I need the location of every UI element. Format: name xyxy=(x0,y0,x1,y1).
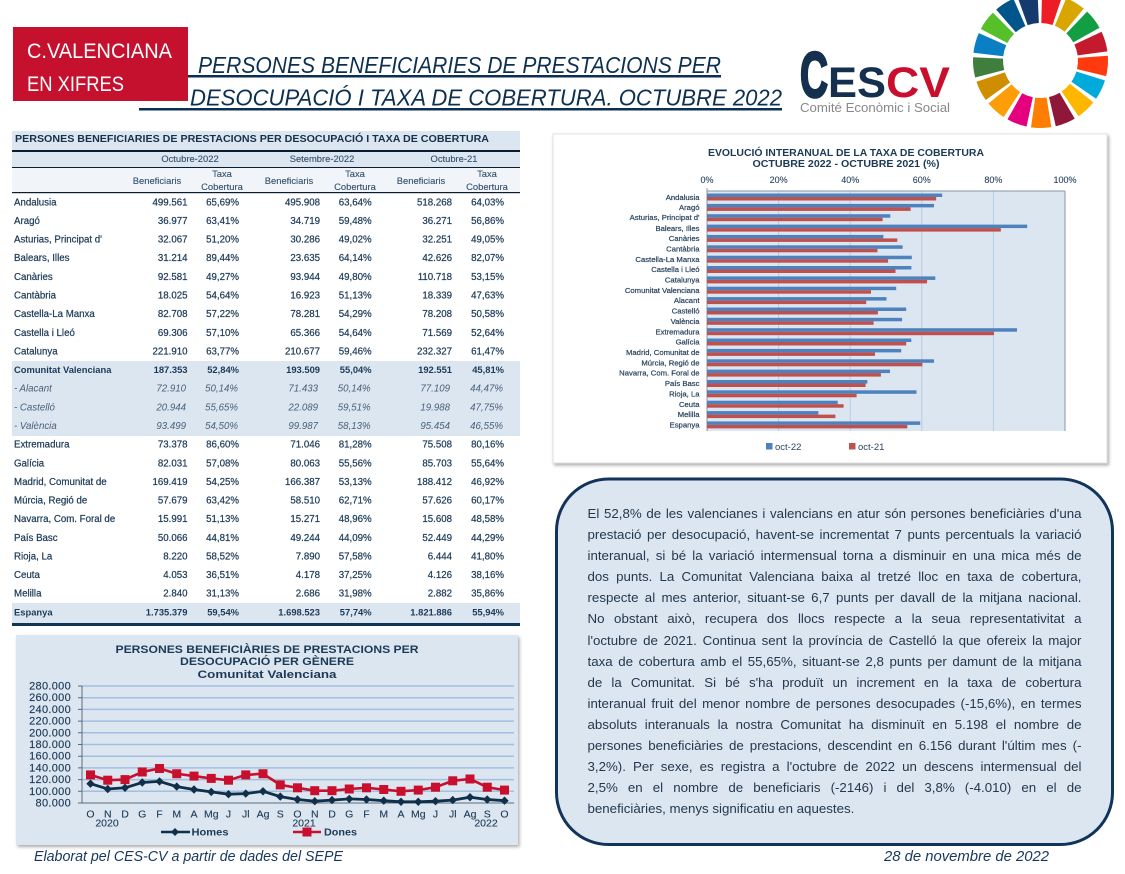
bar chart category labels: Castella-La Manxa xyxy=(635,255,700,264)
table rows: 82.031 xyxy=(158,458,188,469)
table column headers: Cobertura xyxy=(466,181,509,192)
commentary paragraph: beneficiàries, menys significatiu en aquestes. xyxy=(588,801,854,816)
line chart x axis: M xyxy=(379,809,388,821)
line chart x axis: Jl xyxy=(449,809,457,821)
table rows: 48,96% xyxy=(339,514,372,525)
table rows: Castella-La Manxa xyxy=(14,309,95,320)
table rows: 59,48% xyxy=(339,216,372,227)
table rows: 63,64% xyxy=(339,197,372,208)
table rows: Aragó xyxy=(14,216,40,227)
table rows: 49,27% xyxy=(206,272,239,283)
line chart y axis: 140.000 xyxy=(29,762,71,774)
table column headers: Cobertura xyxy=(334,181,377,192)
table rows: 44,81% xyxy=(206,533,239,544)
commentary paragraph: respecte al mes anterior, situant-se 6,7 punts per davall de la mitjana nacional. xyxy=(588,590,1082,605)
table rows: 41,80% xyxy=(471,552,504,562)
table rows: Canàries xyxy=(14,272,53,283)
table rows: 71.569 xyxy=(422,328,452,339)
table column headers: Octubre-21 xyxy=(431,153,477,164)
title xyxy=(139,52,782,110)
icon: SDG wheel xyxy=(966,0,1115,135)
line chart x axis: 2022 xyxy=(474,818,498,830)
table column headers: Taxa xyxy=(212,168,233,179)
table rows: 51,20% xyxy=(206,235,239,246)
line chart x axis xyxy=(86,809,509,830)
commentary paragraph: El 52,8% de les valencianes i valencians en atur són persones beneficiàries d'una xyxy=(588,506,1082,521)
line chart x axis: O xyxy=(86,809,95,821)
bar chart category labels xyxy=(619,193,700,430)
date: 28 de novembre de 2022 xyxy=(883,848,1050,865)
table rows: 31,13% xyxy=(206,589,239,600)
commentary paragraph: interanual fruit del menor nombre de persones desocupades (-15,6%), en termes xyxy=(588,696,1082,711)
table rows: 82.708 xyxy=(158,309,188,320)
line chart x axis: G xyxy=(345,809,353,821)
table column headers: Beneficiaris xyxy=(133,175,182,186)
table rows: 499.561 xyxy=(152,197,188,208)
bar chart axis xyxy=(700,175,1077,185)
table rows: 57,10% xyxy=(206,328,239,339)
table rows: 50,14% xyxy=(205,384,238,395)
table rows: 64,14% xyxy=(339,253,372,264)
line chart legend xyxy=(161,828,357,838)
bar chart category labels: Espanya xyxy=(670,420,700,430)
table rows: 80,16% xyxy=(471,440,504,451)
table rows: 99.987 xyxy=(288,421,319,432)
table rows: 188.412 xyxy=(417,477,452,488)
table rows: 59,46% xyxy=(339,346,372,357)
bar chart category labels: Navarra, Com. Foral de xyxy=(619,369,700,378)
table rows: 46,55% xyxy=(470,421,503,432)
panel: data table xyxy=(12,131,520,626)
line chart x axis: N xyxy=(104,809,112,821)
bar chart category labels: Balears, Illes xyxy=(655,224,700,233)
line chart title: DESOCUPACIÓ PER GÈNERE xyxy=(180,655,354,668)
table rows: 50,14% xyxy=(338,384,371,395)
table rows: 46,92% xyxy=(471,477,504,488)
bar chart category labels: Comunitat Valenciana xyxy=(625,286,700,295)
table rows: 47,63% xyxy=(471,290,504,302)
bar chart category labels: Castelló xyxy=(672,307,700,316)
line chart y axis: 200.000 xyxy=(29,727,71,739)
bar chart axis: 0% xyxy=(700,175,714,185)
table rows: 93.944 xyxy=(290,272,321,283)
commentary paragraph: de la Comunitat. Si bé s'ha produït un increment en la taxa de cobertura xyxy=(588,675,1082,690)
line chart y axis: 80.000 xyxy=(36,798,71,810)
table rows: 53,13% xyxy=(339,477,372,488)
table rows: 47,75% xyxy=(470,402,503,413)
table rows: Catalunya xyxy=(14,346,58,357)
table rows: 62,71% xyxy=(339,496,372,506)
table rows: 4.178 xyxy=(296,570,320,581)
table rows: 57,08% xyxy=(206,458,239,469)
line chart x axis: O xyxy=(293,809,302,821)
bar chart category labels: Catalunya xyxy=(665,276,700,284)
table rows: Ceuta xyxy=(14,570,40,581)
table rows: 61,47% xyxy=(471,346,504,357)
badge: C.Valenciana en xifres: EN XIFRES xyxy=(27,73,124,96)
table rows: 55,64% xyxy=(471,458,504,469)
bar chart category labels: Madrid, Comunitat de xyxy=(626,348,700,357)
table rows: 49,80% xyxy=(339,272,372,283)
logo: CES-CV: Comité Econòmic i Social xyxy=(800,100,950,115)
line chart legend: Dones xyxy=(324,828,357,838)
line chart y axis: 260.000 xyxy=(29,692,71,704)
table rows: 169.419 xyxy=(152,477,188,488)
table rows: 55,65% xyxy=(205,402,238,413)
line chart y axis: 180.000 xyxy=(29,739,71,751)
table rows: 23.635 xyxy=(290,253,320,264)
table rows: 58,52% xyxy=(206,552,239,562)
table rows: 52,84% xyxy=(207,364,240,375)
table rows: 51,13% xyxy=(206,514,239,525)
table rows: 59,54% xyxy=(207,606,240,617)
line chart x axis: O xyxy=(500,809,509,821)
table rows: - Castelló xyxy=(14,402,56,413)
table rows: 60,17% xyxy=(471,496,504,506)
table rows: 30.286 xyxy=(290,235,320,246)
line chart x axis: 2020 xyxy=(95,818,119,830)
table rows: 32.067 xyxy=(158,235,188,246)
commentary paragraph xyxy=(588,503,1088,828)
bar chart category labels: Asturias, Principat d' xyxy=(630,213,700,222)
badge: C.Valenciana en xifres: C.VALENCIANA xyxy=(27,40,172,63)
table rows: 44,09% xyxy=(339,533,372,544)
commentary paragraph: l'octubre de 2021. Continua sent la província de Castelló la que ofereix la major xyxy=(588,633,1082,648)
table column headers: Taxa xyxy=(477,168,498,179)
table rows: 22.089 xyxy=(287,402,319,413)
panel: line chart, gènere xyxy=(16,635,518,845)
bar chart category labels: Rioja, La xyxy=(669,389,700,398)
table rows: 86,60% xyxy=(206,440,239,451)
table rows xyxy=(14,197,505,617)
table rows: 36,51% xyxy=(206,570,239,581)
bar chart title: EVOLUCIÓ INTERANUAL DE LA TAXA DE COBERTURA xyxy=(708,146,984,159)
table rows: 54,25% xyxy=(206,477,239,488)
table rows: 166.387 xyxy=(285,477,320,488)
line chart x axis: F xyxy=(363,809,370,821)
bar chart category labels: Melilla xyxy=(678,410,700,419)
line chart y axis xyxy=(29,680,71,810)
table rows: Cantàbria xyxy=(14,290,57,302)
bar chart axis: 20% xyxy=(770,175,788,185)
table rows: 2.686 xyxy=(296,589,320,600)
table rows: 58.510 xyxy=(290,496,321,506)
table rows: Galícia xyxy=(14,458,45,469)
table rows: Extremadura xyxy=(14,440,70,451)
table rows: 56,86% xyxy=(471,216,504,227)
bar chart category labels: Galícia xyxy=(676,338,700,347)
table rows: 2.882 xyxy=(428,589,452,600)
table rows: 1.821.886 xyxy=(410,606,452,617)
line chart y axis: 120.000 xyxy=(29,774,71,786)
table rows: 58,13% xyxy=(338,421,371,432)
line chart title: PERSONES BENEFICIÀRIES DE PRESTACIONS PER xyxy=(116,643,419,656)
line chart x axis: J xyxy=(433,809,438,821)
table rows: 16.923 xyxy=(290,290,320,302)
table rows: 53,15% xyxy=(471,272,504,283)
bars oct-21 xyxy=(707,197,1001,428)
table rows: 54,64% xyxy=(339,328,372,339)
table rows: 57.626 xyxy=(422,496,452,506)
bar chart category labels: Andalusia xyxy=(666,193,700,202)
table rows: 71.433 xyxy=(288,384,319,395)
table rows: 42.626 xyxy=(422,253,452,264)
line series: Homes xyxy=(90,781,504,802)
table rows: 15.271 xyxy=(290,514,320,525)
bar chart axis: 80% xyxy=(984,175,1002,185)
bar chart legend xyxy=(766,442,884,453)
bar chart category labels: Ceuta xyxy=(679,400,700,409)
table rows: 192.551 xyxy=(418,364,452,375)
bar chart axis: 40% xyxy=(841,175,859,185)
table column headers: Octubre-2022 xyxy=(161,153,219,164)
table rows: 73.378 xyxy=(158,440,188,451)
table rows: 50,58% xyxy=(471,309,504,320)
table rows: Madrid, Comunitat de xyxy=(14,477,107,488)
table rows: 6.444 xyxy=(428,552,453,562)
bar chart category labels: Canàries xyxy=(669,234,700,243)
table column headers: Taxa xyxy=(345,168,366,179)
table rows: 55,94% xyxy=(472,606,505,617)
badge: C.Valenciana en xifres xyxy=(13,27,188,101)
bar chart category labels: Múrcia, Regió de xyxy=(641,358,700,367)
table rows: 1.698.523 xyxy=(278,606,320,617)
table rows: 54,64% xyxy=(206,290,239,302)
table rows: 75.508 xyxy=(422,440,452,451)
bar chart category labels: País Basc xyxy=(665,379,700,388)
logo: CES-CV: ES xyxy=(828,59,886,107)
commentary paragraph: persones beneficiàries de prestacions, descendint en 6.156 durant l'últim mes (- xyxy=(588,738,1082,753)
line chart x axis: F xyxy=(156,809,163,821)
table rows: 4.053 xyxy=(163,570,188,581)
table rows: Espanya xyxy=(14,606,53,617)
table rows: 37,25% xyxy=(339,570,372,581)
bar chart legend: oct-22 xyxy=(775,442,801,453)
line chart x axis: Mg xyxy=(204,809,219,821)
table rows: 495.908 xyxy=(285,197,320,208)
table rows: 65.366 xyxy=(290,328,320,339)
table rows: 54,50% xyxy=(205,421,238,432)
bar chart title: OCTUBRE 2022 - OCTUBRE 2021 (%) xyxy=(752,159,940,170)
title: DESOCUPACIÓ I TAXA DE COBERTURA. OCTUBRE 2022 xyxy=(190,84,782,110)
table rows: 15.991 xyxy=(158,514,188,525)
table rows: 78.208 xyxy=(422,309,452,320)
table rows: 38,16% xyxy=(471,570,504,581)
bar chart legend: oct-21 xyxy=(858,442,884,453)
line chart y axis: 220.000 xyxy=(29,716,71,728)
table rows: 77.109 xyxy=(420,384,451,395)
table rows: 50.066 xyxy=(158,533,188,544)
table rows: 48,58% xyxy=(471,514,504,525)
table rows: 45,81% xyxy=(472,364,505,375)
logo: CES-CV: CV xyxy=(886,59,950,107)
table rows: 110.718 xyxy=(418,272,452,283)
table column headers: Beneficiaris xyxy=(397,175,446,186)
table rows: 57.679 xyxy=(158,496,188,506)
table rows: Rioja, La xyxy=(14,552,53,562)
table rows: 49,02% xyxy=(339,235,372,246)
bar chart axis: 60% xyxy=(913,175,931,185)
table rows: 59,51% xyxy=(338,402,371,413)
table rows: 518.268 xyxy=(417,197,452,208)
line chart x axis: S xyxy=(277,809,284,821)
commentary paragraph: 2,5% en el nombre de beneficiaris (-2146) i del 3,8% (-4.010) en el de xyxy=(588,780,1082,795)
table rows: 18.025 xyxy=(158,290,188,302)
table rows: 193.509 xyxy=(286,364,320,375)
bar chart category labels: Aragó xyxy=(679,203,700,212)
line chart y axis: 280.000 xyxy=(29,680,71,692)
commentary paragraph: dos punts. La Comunitat Valenciana baixa al tretzé lloc en taxa de cobertura, xyxy=(588,569,1082,584)
table rows: 52,64% xyxy=(471,328,504,339)
table rows: 54,29% xyxy=(339,309,372,320)
bar chart category labels: Extremadura xyxy=(655,327,700,336)
bar chart category labels: València xyxy=(671,317,700,326)
line chart x axis: G xyxy=(138,809,146,821)
logo: CES-CV: C xyxy=(800,39,828,111)
table rows: Melilla xyxy=(14,589,42,600)
line chart x axis: Jl xyxy=(242,809,250,821)
table rows: 2.840 xyxy=(163,589,188,600)
line chart x axis: D xyxy=(328,809,336,821)
table rows: 32.251 xyxy=(422,235,452,246)
table rows: Castella i Lleó xyxy=(14,328,75,339)
line chart legend: Homes xyxy=(192,828,229,838)
line chart x axis: 2021 xyxy=(292,818,316,830)
table rows: 63,42% xyxy=(206,496,239,506)
table rows: 31,98% xyxy=(339,589,372,600)
table rows: 31.214 xyxy=(158,253,188,264)
table rows: 57,74% xyxy=(340,606,372,617)
table column headers xyxy=(133,153,509,192)
line chart x axis: J xyxy=(226,809,231,821)
table column headers: Cobertura xyxy=(201,181,244,192)
table rows: Asturias, Principat d' xyxy=(14,235,102,246)
table rows: 1.735.379 xyxy=(146,606,188,617)
line chart title: Comunitat Valenciana xyxy=(198,669,338,681)
table rows: 95.454 xyxy=(420,421,451,432)
bars oct-22 xyxy=(707,194,1027,425)
table rows: - Alacant xyxy=(14,384,53,395)
table rows: 65,69% xyxy=(206,197,239,208)
table rows: 64,03% xyxy=(471,197,504,208)
line chart y axis: 160.000 xyxy=(29,751,71,763)
table rows: 36.271 xyxy=(422,216,452,227)
table rows: 92.581 xyxy=(158,272,188,283)
bar chart category labels: Alacant xyxy=(674,296,700,305)
table rows: 80.063 xyxy=(290,458,320,469)
table rows: 7.890 xyxy=(296,552,321,562)
table column headers: Beneficiaris xyxy=(265,175,314,186)
table rows: 52.449 xyxy=(422,533,452,544)
table rows: 93.499 xyxy=(156,421,187,432)
bar chart category labels: Castella i Lleó xyxy=(651,265,700,274)
logo: CES-CV xyxy=(800,39,950,115)
line chart x axis: A xyxy=(190,809,198,821)
table rows: Múrcia, Regió de xyxy=(14,496,87,506)
line series: Dones xyxy=(90,768,504,791)
table rows: 55,56% xyxy=(339,458,372,469)
table rows: Balears, Illes xyxy=(14,253,70,264)
table rows: 89,44% xyxy=(206,253,239,264)
line chart x axis: A xyxy=(397,809,405,821)
table rows: 69.306 xyxy=(158,328,188,339)
panel: bar chart, evolució interanual xyxy=(553,134,1107,463)
table rows: 36.977 xyxy=(158,216,188,227)
table rows: 210.677 xyxy=(285,346,320,357)
panel: text commentary xyxy=(556,479,1112,844)
table rows: Comunitat Valenciana xyxy=(14,364,112,375)
line chart title xyxy=(116,643,419,681)
table rows: 44,47% xyxy=(470,384,503,395)
commentary paragraph: interanual, si bé la variació intermensual torna a disminuir en una mica més de xyxy=(588,548,1082,563)
table rows: 71.046 xyxy=(290,440,320,451)
table rows: 51,13% xyxy=(339,290,372,302)
table rows: 49.244 xyxy=(290,533,321,544)
table rows: 72.910 xyxy=(156,384,187,395)
bar chart category labels: Cantàbria xyxy=(666,244,700,253)
commentary paragraph: absoluts interanuals la nostra Comunitat ha disminuït en 5.198 el nombre de xyxy=(588,717,1082,732)
bar chart axis: 100% xyxy=(1053,175,1077,185)
line chart x axis: S xyxy=(484,809,491,821)
table rows: 78.281 xyxy=(290,309,320,320)
line chart x axis: N xyxy=(311,809,319,821)
title: PERSONES BENEFICIARIES DE PRESTACIONS PER xyxy=(198,52,721,78)
table rows: Navarra, Com. Foral de xyxy=(14,514,115,525)
table rows: 221.910 xyxy=(152,346,188,357)
table rows: Andalusia xyxy=(14,197,57,208)
table rows: 35,86% xyxy=(471,589,504,600)
source note: Elaborat pel CES-CV a partir de dades del SEPE xyxy=(34,848,344,865)
table rows: País Basc xyxy=(14,533,58,544)
table title: PERSONES BENEFICIARIES DE PRESTACIONS PER DESOCUPACIÓ I TAXA DE COBERTURA xyxy=(15,132,489,145)
commentary paragraph: prestació per desocupació, havent-se incrementat 7 punts percentuals la variació xyxy=(588,527,1082,542)
line chart y axis: 240.000 xyxy=(29,704,71,716)
line chart y axis: 100.000 xyxy=(29,786,71,798)
commentary paragraph: 3,2%). Per sexe, es registra a l'octubre de 2022 un descens intermensual del xyxy=(588,759,1082,774)
table rows: 187.353 xyxy=(154,364,188,375)
table rows: 57,58% xyxy=(339,552,372,562)
line chart x axis: Mg xyxy=(411,809,426,821)
line chart x axis: Ag xyxy=(464,809,477,821)
table rows: 85.703 xyxy=(422,458,452,469)
table rows: 82,07% xyxy=(471,253,504,264)
line chart x axis: M xyxy=(172,809,181,821)
table rows: 18.339 xyxy=(422,290,452,302)
table rows: 8.220 xyxy=(163,552,188,562)
bar chart title xyxy=(708,146,984,170)
table rows: 15.608 xyxy=(422,514,452,525)
table rows: 4.126 xyxy=(428,570,452,581)
table rows: 81,28% xyxy=(339,440,372,451)
table rows: 63,41% xyxy=(206,216,239,227)
line chart x axis: Ag xyxy=(257,809,270,821)
table rows: 57,22% xyxy=(206,309,239,320)
table rows: 232.327 xyxy=(417,346,452,357)
table rows: - València xyxy=(14,421,57,432)
commentary paragraph: taxa de cobertura amb el 55,65%, situant-se 2,8 punts per damunt de la mitjana xyxy=(588,654,1082,669)
table column headers: Setembre-2022 xyxy=(290,153,354,164)
table rows: 44,29% xyxy=(471,533,504,544)
commentary paragraph: No obstant això, recupera dos llocs respecte a la seua representativitat a xyxy=(588,611,1082,626)
table rows: 34.719 xyxy=(290,216,320,227)
table rows: 55,04% xyxy=(340,364,372,375)
table rows: 19.988 xyxy=(420,402,451,413)
table rows: 49,05% xyxy=(471,235,504,246)
table rows: 20.944 xyxy=(155,402,187,413)
table rows: 63,77% xyxy=(206,346,239,357)
line chart x axis: D xyxy=(121,809,129,821)
